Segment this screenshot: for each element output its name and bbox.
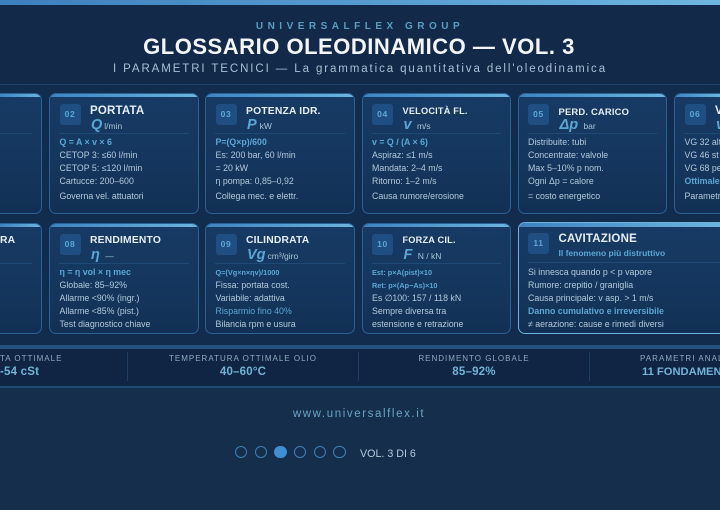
- card name: PERD. CARICO: [558, 106, 629, 117]
- card name: FORZA CIL.: [402, 235, 456, 245]
- card body: Q=(Vg×n×ηv)/1000: [216, 268, 279, 277]
- card body: Si innesca quando p < p vapore: [528, 267, 652, 277]
- card name: PORTATA: [90, 104, 144, 116]
- symbol and unit: Ql/min: [91, 116, 122, 132]
- number badge 06: 06: [690, 108, 700, 118]
- card body (visible part): VG 46 st: [684, 150, 719, 160]
- card name (visible part): RA: [0, 234, 15, 246]
- card body (visible part): Parametr: [684, 190, 720, 200]
- pagination dots: [235, 446, 346, 458]
- number badge 10: [372, 234, 393, 254]
- top accent bar: [0, 0, 720, 5]
- card body: = 20 kW: [216, 163, 248, 173]
- card 02: portata: [49, 92, 198, 214]
- card body: Es: 200 bar, 60 l/min: [216, 150, 296, 160]
- card body: Concentrate: valvole: [528, 150, 608, 160]
- symbol and unit: F N / kN: [404, 246, 441, 262]
- card body: Max 5–10% p nom.: [528, 163, 604, 173]
- card 03: potenza idraulica: [205, 92, 354, 214]
- symbol and unit: v m/s: [404, 116, 431, 132]
- card body: Fissa: portata cost.: [216, 280, 290, 290]
- subtitle: I PARAMETRI TECNICI — La grammatica quantitativa dell'oleodinamica: [113, 62, 607, 74]
- symbol and unit: P kW: [247, 116, 272, 132]
- stat 1 (cropped by left edge): TA OTTIMALE: [0, 354, 62, 362]
- number badge 03: [216, 104, 236, 124]
- stat 1 (cropped by left edge): [0, 354, 62, 378]
- card name: CAVITAZIONE: [558, 232, 637, 244]
- card body: Causa principale: v asp. > 1 m/s: [528, 293, 653, 303]
- title: GLOSSARIO OLEODINAMICO — VOL. 3: [143, 34, 575, 59]
- card body: [528, 267, 664, 329]
- card body: Bilancia rpm e usura: [216, 319, 296, 329]
- card body: η = η vol × η mec: [60, 267, 131, 277]
- card name: VELOCITÀ FL.: [402, 106, 468, 116]
- card 11: cavitazione highlighted: [518, 222, 720, 334]
- card 07: cropped by left edge: [0, 222, 42, 334]
- card body: Es ∅100: 157 / 118 kN: [372, 293, 461, 303]
- number badge 04: [372, 104, 393, 124]
- stat 2: temperatura ottimale olio: TEMPERATURA OTTIMALE OLIO: [169, 354, 317, 362]
- card body: [216, 137, 298, 201]
- card 09: cilindrata: [205, 222, 354, 334]
- card body: Danno cumulativo e irreversibile: [528, 306, 664, 316]
- card body: CETOP 5: ≤120 l/min: [60, 163, 142, 173]
- card body: = costo energetico: [528, 190, 600, 200]
- card 04: velocita fluido: [362, 92, 510, 214]
- card body: [528, 137, 608, 201]
- card body (visible part): [684, 137, 720, 200]
- card body: [216, 268, 296, 329]
- number badge 02: 02: [65, 108, 75, 118]
- card body: CETOP 3: ≤60 l/min: [60, 150, 137, 160]
- number badge 09: 09: [221, 238, 231, 248]
- number badge 02: [60, 104, 80, 124]
- stat 3: rendimento globale: RENDIMENTO GLOBALE: [418, 354, 530, 362]
- number badge 06: [684, 104, 706, 124]
- number badge 11: 11: [533, 238, 544, 248]
- card body: [372, 137, 464, 200]
- card body: Q = A × v × 6: [60, 137, 112, 147]
- stat 2: temperatura ottimale olio: [169, 354, 317, 378]
- card body: Rumore: crepitio / graniglia: [528, 280, 633, 290]
- brand line: UNIVERSALFLEX GROUP: [256, 20, 464, 32]
- card body: Ritorno: 1–2 m/s: [372, 176, 437, 186]
- stat dividers: [127, 352, 128, 381]
- symbol and unit: Δp bar: [560, 116, 596, 132]
- card body: Risparmio fino 40%: [216, 306, 292, 316]
- card body: [60, 137, 144, 200]
- card 06: cropped by right edge: [674, 92, 720, 214]
- number badge 03: 03: [221, 108, 231, 118]
- card body: Allarme <90% (ingr.): [60, 293, 139, 303]
- card 05: perdita di carico: [518, 92, 666, 214]
- number badge 08: 08: [65, 238, 75, 248]
- card body (visible part): Ottimale: [684, 176, 720, 186]
- number badge 05: [528, 104, 549, 124]
- stat 3: rendimento globale: 85–92%: [452, 366, 496, 378]
- stat 1 (cropped by left edge): -54 cSt: [0, 366, 39, 378]
- number badge 09: [216, 234, 236, 254]
- number badge 05: 05: [533, 108, 544, 118]
- card 08: rendimento: [49, 222, 198, 334]
- card body: [60, 267, 150, 329]
- card 01 (cropped by left edge): [0, 92, 42, 214]
- card body: [372, 268, 463, 329]
- card 10: forza cilindro: [362, 222, 510, 334]
- card body: Causa rumore/erosione: [372, 190, 464, 200]
- card body: Mandata: 2–4 m/s: [372, 163, 442, 173]
- cards background strip: [0, 85, 720, 345]
- stat 4 (cropped by right edge): [640, 354, 720, 378]
- card body: ≠ aerazione: cause e rimedi diversi: [528, 319, 664, 329]
- card body: Ogni Δp = calore: [528, 176, 594, 186]
- stats band: [0, 344, 720, 388]
- stat 3: rendimento globale: [418, 354, 530, 378]
- card body: Test diagnostico chiave: [60, 319, 150, 329]
- stat 4 (cropped by right edge): 11 FONDAMEN: [642, 366, 720, 378]
- card subtitle: Il fenomeno più distruttivo: [558, 248, 665, 258]
- card body: P=(Q×p)/600: [216, 137, 267, 147]
- card name: POTENZA IDR.: [246, 106, 321, 117]
- card body: Distribuite: tubi: [528, 137, 586, 147]
- symbol and unit: η —: [91, 246, 114, 262]
- card body: η pompa: 0,85–0,92: [216, 176, 294, 186]
- card body: Variabile: adattiva: [216, 293, 285, 303]
- card body: Allarme <85% (pist.): [60, 306, 139, 316]
- card body: Governa vel. attuatori: [60, 190, 144, 200]
- card name: RENDIMENTO: [90, 234, 161, 246]
- card body: v = Q / (A × 6): [372, 137, 428, 147]
- volume label: VOL. 3 DI 6: [360, 448, 416, 460]
- card body: Cartucce: 200–600: [60, 176, 134, 186]
- card body: Collega mec. e elettr.: [216, 190, 298, 200]
- card body: Aspiraz: ≤1 m/s: [372, 150, 433, 160]
- symbol and unit: Vgcm³/giro: [247, 246, 298, 262]
- number badge 04: 04: [377, 108, 388, 118]
- header band: [0, 5, 720, 85]
- card body: Ret: p×(Ap−As)×10: [372, 281, 438, 290]
- number badge 11: [528, 233, 549, 254]
- card name: CILINDRATA: [246, 234, 309, 246]
- card body: Sempre diversa tra: [372, 306, 446, 316]
- card body: Globale: 85–92%: [60, 280, 127, 290]
- number badge 08: [60, 234, 80, 254]
- card body: estensione e retrazione: [372, 319, 463, 329]
- website url: www.universalflex.it: [293, 408, 425, 420]
- number badge 10: 10: [377, 238, 388, 248]
- stat 2: temperatura ottimale olio: 40–60°C: [220, 366, 266, 378]
- card body: Est: p×A(pist)×10: [372, 268, 432, 277]
